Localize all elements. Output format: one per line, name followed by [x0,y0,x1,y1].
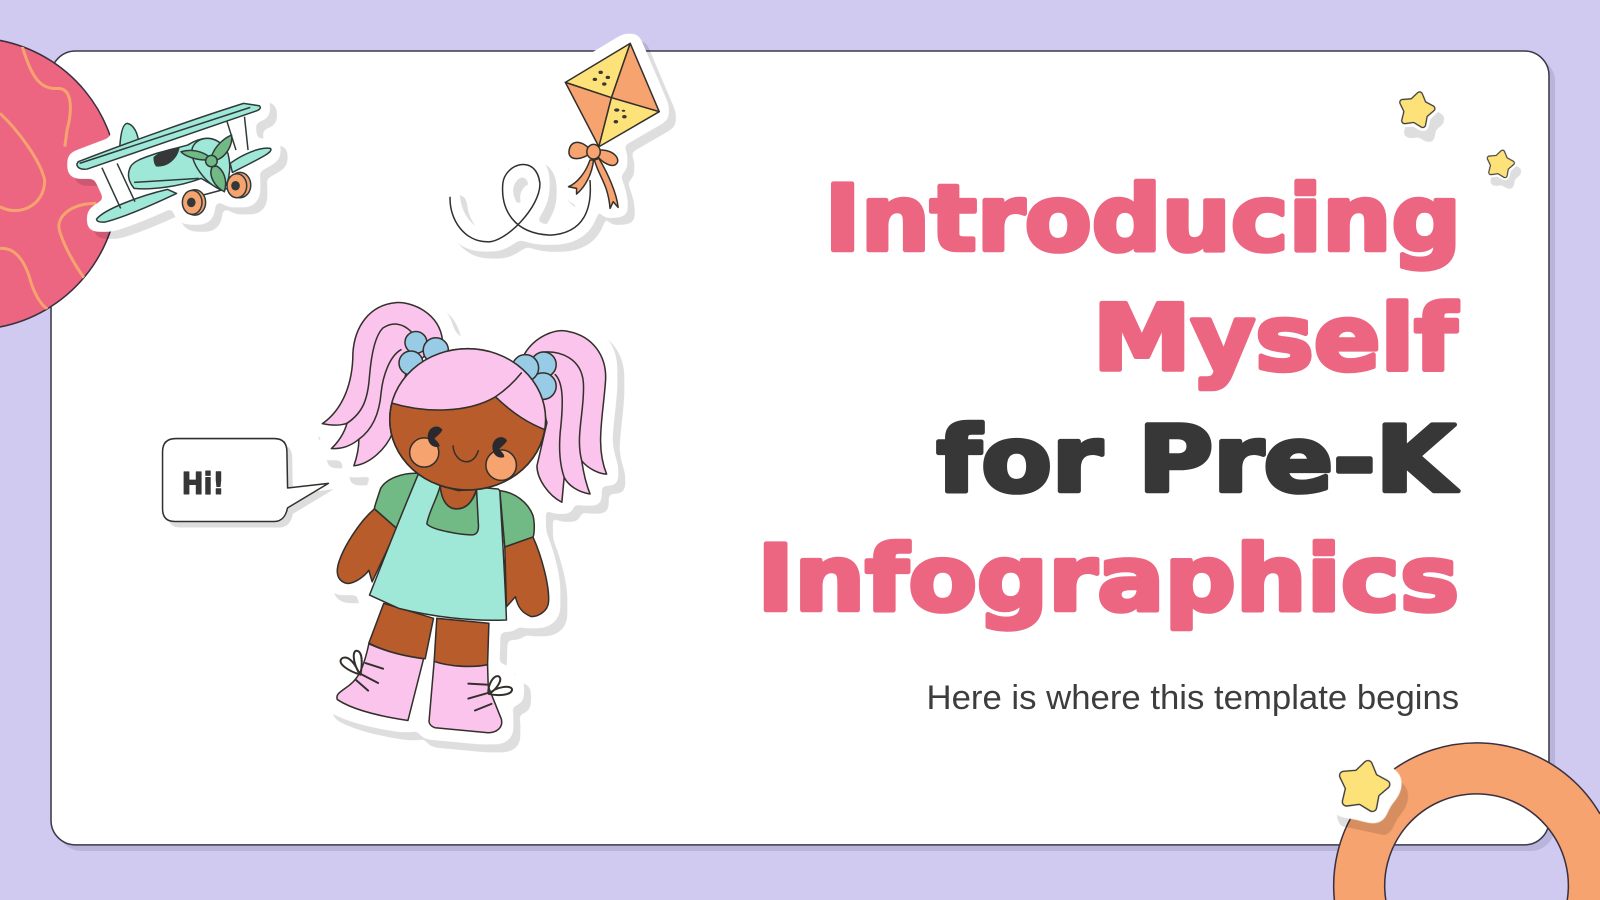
neck [440,486,477,509]
decoration: pink circle [0,40,118,327]
kite string [450,164,590,242]
bubble text: Hi! [182,467,224,502]
left ponytail [322,303,442,466]
hair ties [399,331,556,399]
subtitle: Here is where this template begins [927,679,1459,717]
title [757,167,1461,632]
cheeks [410,438,439,467]
laces [341,651,512,711]
callout: Hi speech bubble [163,439,334,527]
decoration: orange ring [1334,743,1600,900]
title line 2: Myself [1093,286,1459,391]
fringe [392,350,545,430]
arms and legs [337,509,549,666]
character: girl sticker [322,303,607,733]
title line 4: Infographics [757,527,1459,632]
head outline [390,349,546,490]
eyes [428,426,442,447]
sleeves [374,473,534,547]
head [390,349,546,490]
icon: star on ring [1339,760,1389,809]
boots [337,644,502,733]
bib [427,486,478,535]
title line 1: Introducing [824,167,1461,272]
title line 3: for Pre-K [937,408,1459,513]
icon: star right [1487,150,1514,176]
icon: airplane sticker [77,103,271,222]
dress [369,473,506,620]
smile [453,446,478,462]
icon: star top [1399,92,1434,126]
right ponytail [525,331,607,502]
icon: kite sticker [450,43,659,242]
